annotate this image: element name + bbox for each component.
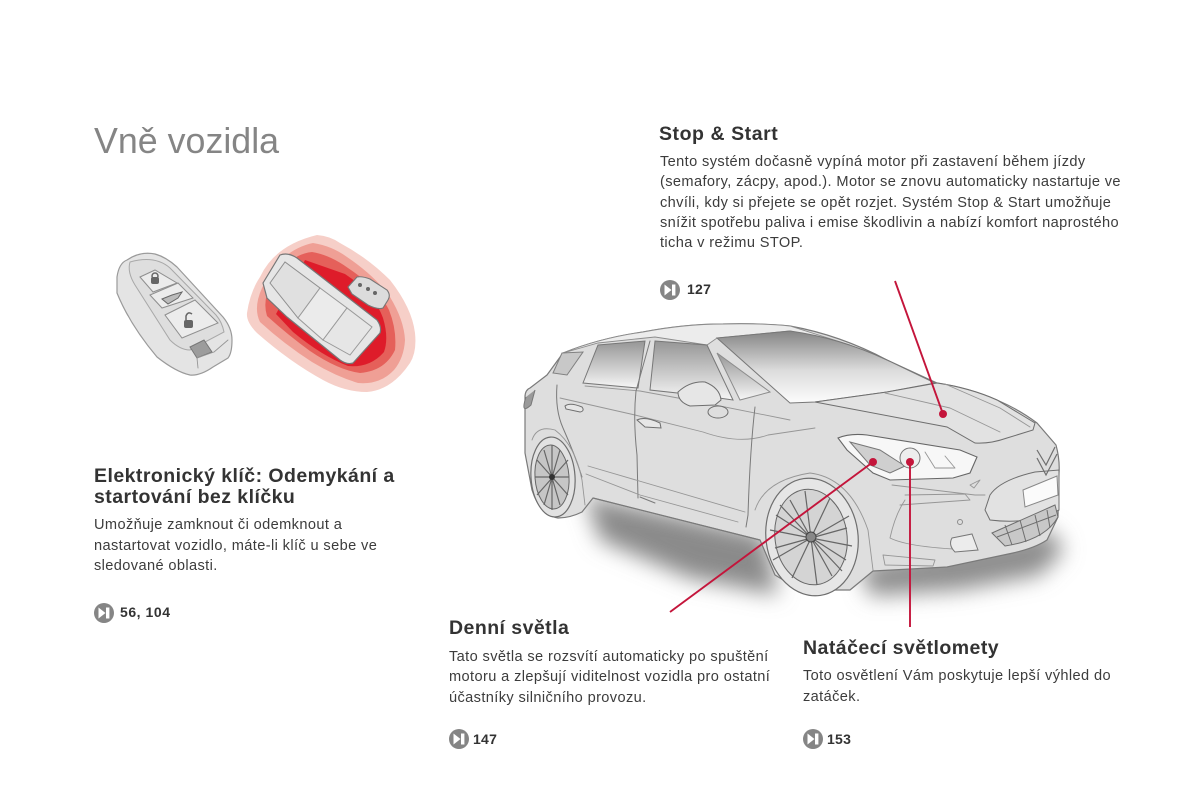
text block: Stop & Start description: snížit spotřebu paliva i emise škodlivin a nabízí komfort naprostého <box>660 215 1119 231</box>
text block: electronic key description <box>94 517 377 574</box>
rear wheel <box>528 429 585 518</box>
grille and badge <box>985 447 1059 546</box>
mini car top view <box>263 254 381 364</box>
heading: electronic key: Elektronický klíč: Odemykání a <box>94 465 395 487</box>
front bumper details <box>883 480 985 566</box>
callout: Stop & Start leader <box>895 281 947 418</box>
callout: daytime lights leader <box>670 458 877 612</box>
page reference 153: 153 <box>827 731 851 747</box>
quarter window <box>717 353 770 400</box>
text block: Stop & Start description: chvíli, kdy si přejete se opět rozjet. Systém Stop & Start umožňuje <box>660 195 1111 211</box>
text block: electronic key description: sledované oblasti. <box>94 558 218 574</box>
illustration: car <box>524 324 1064 602</box>
icon: key fob <box>117 253 232 375</box>
text block: Stop & Start description: (semafory, zácpy, apod.). Motor se znovu automaticky nastartuje ve <box>660 174 1121 190</box>
door handles <box>565 404 661 428</box>
text block: cornering headlights description: zatáček. <box>803 689 860 705</box>
roof band <box>563 324 850 353</box>
door lines <box>524 341 815 540</box>
icon: car boot <box>162 292 182 304</box>
mini key <box>348 277 389 309</box>
panel: electronic key text <box>94 465 395 623</box>
text block: daytime lights description: motoru a zlepšují viditelnost vozidla pro ostatní <box>449 669 770 685</box>
text block: Stop & Start description: Tento systém dočasně vypíná motor při zastavení během jízdy <box>660 154 1086 170</box>
page reference 147 <box>449 729 497 749</box>
car body <box>525 324 1059 590</box>
headlight <box>838 434 977 480</box>
windshield <box>717 331 935 403</box>
heading: electronic key: startování bez klíčku <box>94 486 295 508</box>
page reference 153 <box>803 729 851 749</box>
rear glass <box>553 352 583 375</box>
heading: Stop & Start: Stop & Start <box>659 123 778 145</box>
text block: electronic key description: Umožňuje zamknout či odemknout a <box>94 517 343 533</box>
hood <box>815 383 1035 443</box>
rear side window <box>583 341 645 388</box>
page reference 127 <box>660 280 711 300</box>
text block: cornering headlights description <box>803 668 1111 705</box>
page reference 127: 127 <box>687 281 711 297</box>
front wheel <box>755 472 873 602</box>
page reference 56, 104: 56, 104 <box>120 604 171 620</box>
front side window <box>650 341 733 400</box>
panel: stop and start text <box>659 123 1121 300</box>
icon: closed padlock <box>151 273 159 284</box>
detection zones <box>247 235 415 392</box>
heading: electronic key <box>94 465 395 508</box>
panel: cornering headlights text <box>803 637 1111 749</box>
callout: cornering headlights leader <box>906 458 914 627</box>
text block: daytime lights description: Tato světla se rozsvítí automaticky po spuštění <box>449 649 769 665</box>
text block: daytime lights description: účastníky silničního provozu. <box>449 690 647 706</box>
heading: daytime lights: Denní světla <box>449 617 569 639</box>
text block: Stop & Start description <box>660 154 1121 251</box>
page reference 147: 147 <box>473 731 497 747</box>
icon: open padlock <box>184 313 193 328</box>
title: Vně vozidla <box>94 121 279 161</box>
text block: cornering headlights description: Toto osvětlení Vám poskytuje lepší výhled do <box>803 668 1111 684</box>
text block: Stop & Start description: ticha v režimu STOP. <box>660 235 803 251</box>
wing mirror <box>678 382 728 418</box>
text block: daytime lights description <box>449 649 770 706</box>
text block: electronic key description: nastartovat vozidlo, máte-li klíč u sebe ve <box>94 538 377 554</box>
car shadow <box>585 495 1064 596</box>
page reference 56, 104 <box>94 603 171 623</box>
panel: daytime lights text <box>449 617 770 749</box>
icon: detection zone with car <box>247 235 415 392</box>
heading: cornering headlights: Natáčecí světlomety <box>803 637 999 659</box>
